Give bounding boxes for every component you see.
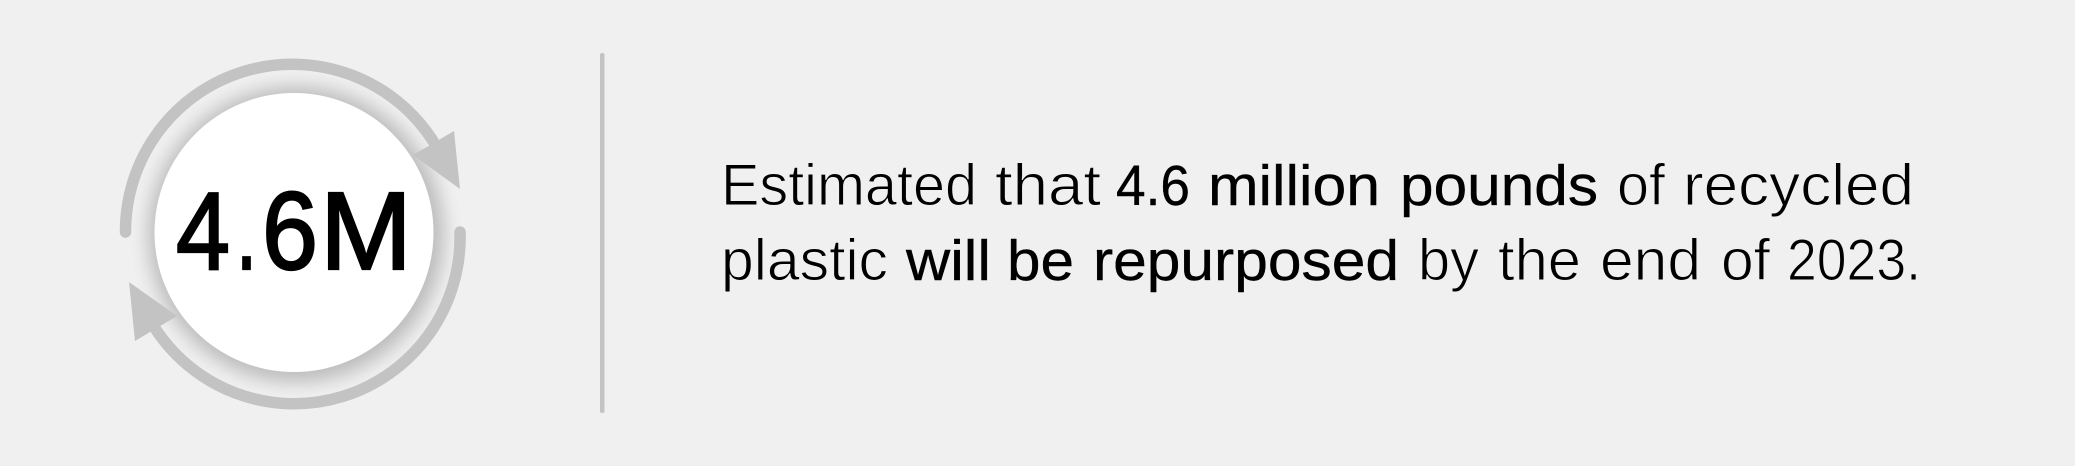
- white circle: [154, 93, 434, 372]
- description text: 4.6: [1116, 154, 1190, 218]
- description text: repurposed: [1093, 229, 1399, 293]
- description text: the: [1498, 228, 1581, 293]
- description text: 2023.: [1787, 228, 1921, 293]
- description text: [721, 153, 1921, 293]
- description text: that: [995, 153, 1101, 218]
- statistic value: 4: [176, 170, 230, 293]
- statistic value: .: [236, 170, 257, 293]
- bottom recycling arrow: [129, 232, 460, 404]
- description text: of: [1721, 228, 1771, 293]
- description text: plastic: [721, 228, 888, 293]
- top recycling arrow: [125, 64, 460, 232]
- description text: recycled: [1683, 153, 1914, 218]
- description text: of: [1617, 153, 1666, 218]
- statistic value: [176, 170, 412, 293]
- description text: Estimated: [721, 153, 977, 218]
- description text: pounds: [1400, 154, 1598, 218]
- statistic value: 6: [262, 170, 318, 293]
- description text: will: [905, 229, 991, 293]
- description text: end: [1600, 228, 1701, 293]
- circle shadow: [148, 86, 444, 382]
- vertical divider: [600, 53, 604, 413]
- description text: be: [1007, 229, 1074, 293]
- panel: recycling badge: [125, 64, 460, 404]
- statistic value: M: [320, 170, 412, 293]
- description text: million: [1208, 154, 1380, 218]
- description text: by: [1418, 228, 1479, 293]
